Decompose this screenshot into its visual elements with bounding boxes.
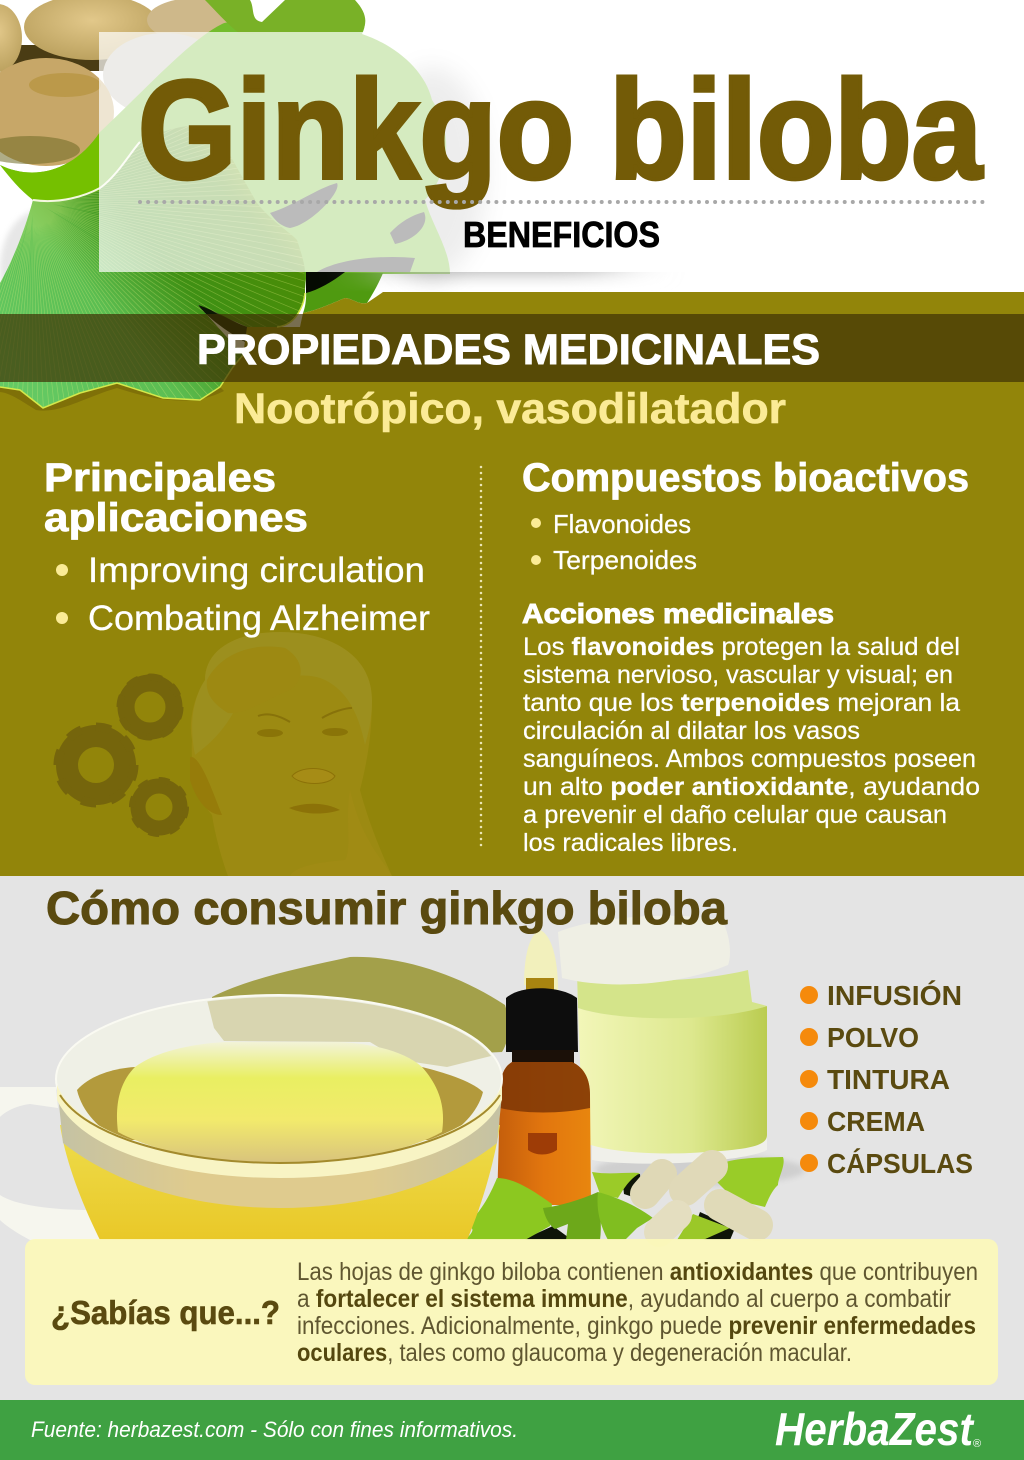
heading: Cómo consumir ginkgo biloba	[46, 882, 727, 934]
body text	[523, 633, 980, 857]
heading: Compuestos bioactivos	[522, 456, 969, 500]
fingers on chin	[290, 790, 392, 876]
clear glass band	[58, 1095, 502, 1208]
heading	[44, 456, 308, 540]
jar neck	[577, 970, 767, 1018]
body text: Los flavonoides protegen la salud del	[523, 633, 960, 661]
callout body: infecciones. Adicionalmente, ginkgo puede prevenir enfermedades	[297, 1312, 976, 1340]
footer	[0, 1400, 1024, 1460]
list: Combating Alzheimer	[88, 599, 430, 638]
leaf slit	[198, 305, 262, 342]
illustration: thinking man	[190, 632, 392, 876]
body text: tanto que los terpenoides mejoran la	[523, 689, 960, 717]
list	[56, 551, 430, 638]
tea lower surface	[77, 1067, 483, 1140]
upper leaf blade	[0, 132, 100, 201]
white stem highlight	[33, 142, 140, 201]
collar	[526, 978, 554, 1000]
jar base	[592, 1130, 767, 1164]
translucent white overlay behind the title	[99, 32, 1024, 272]
back leaf	[592, 1172, 640, 1198]
bright leaf edge	[0, 293, 305, 408]
photo: tincture bottle	[497, 930, 591, 1205]
soft shadow below overlay	[385, 272, 615, 292]
bottle	[497, 1062, 591, 1205]
front rim	[57, 1085, 502, 1178]
logo: HerbaZest: HerbaZest	[775, 1403, 974, 1455]
callout body: Las hojas de ginkgo biloba contienen antioxidantes que contribuyen	[297, 1258, 978, 1286]
dark notch	[306, 272, 345, 293]
logo: HerbaZest: ®	[973, 1438, 981, 1450]
dark gaps	[522, 1174, 735, 1240]
left leaf	[462, 1178, 552, 1240]
eyes	[257, 708, 352, 737]
heading: aplicaciones	[44, 496, 308, 540]
jar body	[578, 1006, 767, 1153]
tea surface	[117, 1042, 443, 1162]
nose	[292, 768, 335, 784]
list: forms of consumption: CREMA	[827, 1106, 925, 1137]
header photo: stones and ginkgo leaves	[0, 0, 487, 408]
top leaf tip	[205, 0, 365, 34]
callout: did you know	[25, 1239, 998, 1385]
leaf cast shadow	[377, 67, 487, 277]
center leaf left lobe	[543, 1192, 601, 1240]
leaf edge shadow	[0, 383, 224, 411]
dotted divider	[140, 200, 988, 204]
dark upper glass	[500, 1062, 590, 1112]
callout heading: ¿Sabías que...?	[51, 1294, 280, 1331]
body text: los radicales libres.	[523, 829, 738, 857]
subheading: medicinal actions: Acciones medicinales	[522, 598, 834, 629]
source note: Fuente: herbazest.com - Sólo con fines informativos.	[31, 1417, 518, 1442]
photo: ginkgo leaves	[462, 1157, 784, 1240]
body text: sistema nervioso, vascular y visual; en	[523, 661, 953, 689]
right small leaf	[303, 272, 383, 313]
photo: capsules	[645, 1166, 757, 1232]
list: forms of consumption	[800, 980, 973, 1179]
right leaf	[705, 1157, 784, 1207]
jar shadow	[595, 1154, 805, 1186]
back leaf	[0, 0, 450, 274]
body text: circulación al dilatar los vasos	[523, 717, 860, 745]
photo: powder heap	[212, 957, 508, 1060]
stones	[0, 0, 243, 166]
lid	[558, 916, 730, 984]
compound list: Terpenoides	[553, 545, 697, 575]
upper handle	[0, 1087, 58, 1117]
glass rim	[56, 995, 502, 1163]
callout body: a fortalecer el sistema immune, ayudando al cuerpo a combatir	[297, 1285, 951, 1313]
list: forms of consumption: INFUSIÓN	[827, 980, 962, 1011]
powder through glass	[208, 997, 491, 1067]
hand on forehead	[207, 647, 301, 713]
subtitle: BENEFICIOS	[463, 214, 660, 255]
list: forms of consumption: POLVO	[827, 1022, 919, 1053]
mouth	[289, 804, 340, 814]
list: Improving circulation	[88, 551, 425, 590]
compound list: Flavonoides	[553, 509, 691, 539]
gear bottom	[132, 780, 186, 834]
head and hair	[191, 632, 392, 876]
tea body	[60, 1125, 500, 1240]
leaf veins	[0, 40, 193, 360]
lower handle	[0, 1195, 105, 1240]
gear left	[58, 727, 134, 803]
hair highlight	[192, 632, 372, 755]
photo: cup of tea	[0, 985, 502, 1240]
compound list	[531, 509, 697, 575]
heading: Principales	[44, 456, 276, 500]
body text: un alto poder antioxidante , ayudando	[523, 773, 980, 801]
dark heading band	[0, 314, 1024, 382]
body text: sanguíneos. Ambos compuestos poseen	[523, 745, 976, 773]
panel: bioactive compounds	[522, 456, 980, 857]
olive panel: medicinal properties	[0, 292, 1024, 876]
dropper tip in bottle	[528, 1133, 557, 1154]
list: forms of consumption: CÁPSULAS	[827, 1148, 973, 1179]
subheading: nootropic, vasodilator: Nootrópico, vasodilatador	[234, 385, 786, 433]
main leaf	[0, 126, 305, 408]
panel: main applications	[44, 456, 430, 638]
back leaf folds	[270, 183, 425, 272]
heading: medicinal properties: PROPIEDADES MEDICINALES	[197, 326, 820, 374]
center leaf right lobe	[597, 1192, 653, 1240]
list: forms of consumption: TINTURA	[827, 1064, 950, 1095]
ear	[190, 757, 222, 815]
ground shadow	[0, 210, 80, 330]
photo: jar of cream	[558, 916, 805, 1186]
gear top	[120, 677, 180, 737]
dropper bulb	[524, 930, 558, 990]
body text: a prevenir el daño celular que causan	[523, 801, 947, 829]
icon: gears	[58, 677, 186, 834]
panel: how to consume	[0, 876, 1024, 1400]
cap	[506, 988, 578, 1052]
callout body	[297, 1258, 978, 1367]
callout body: oculares, tales como glaucoma y degeneración macular.	[297, 1339, 852, 1367]
